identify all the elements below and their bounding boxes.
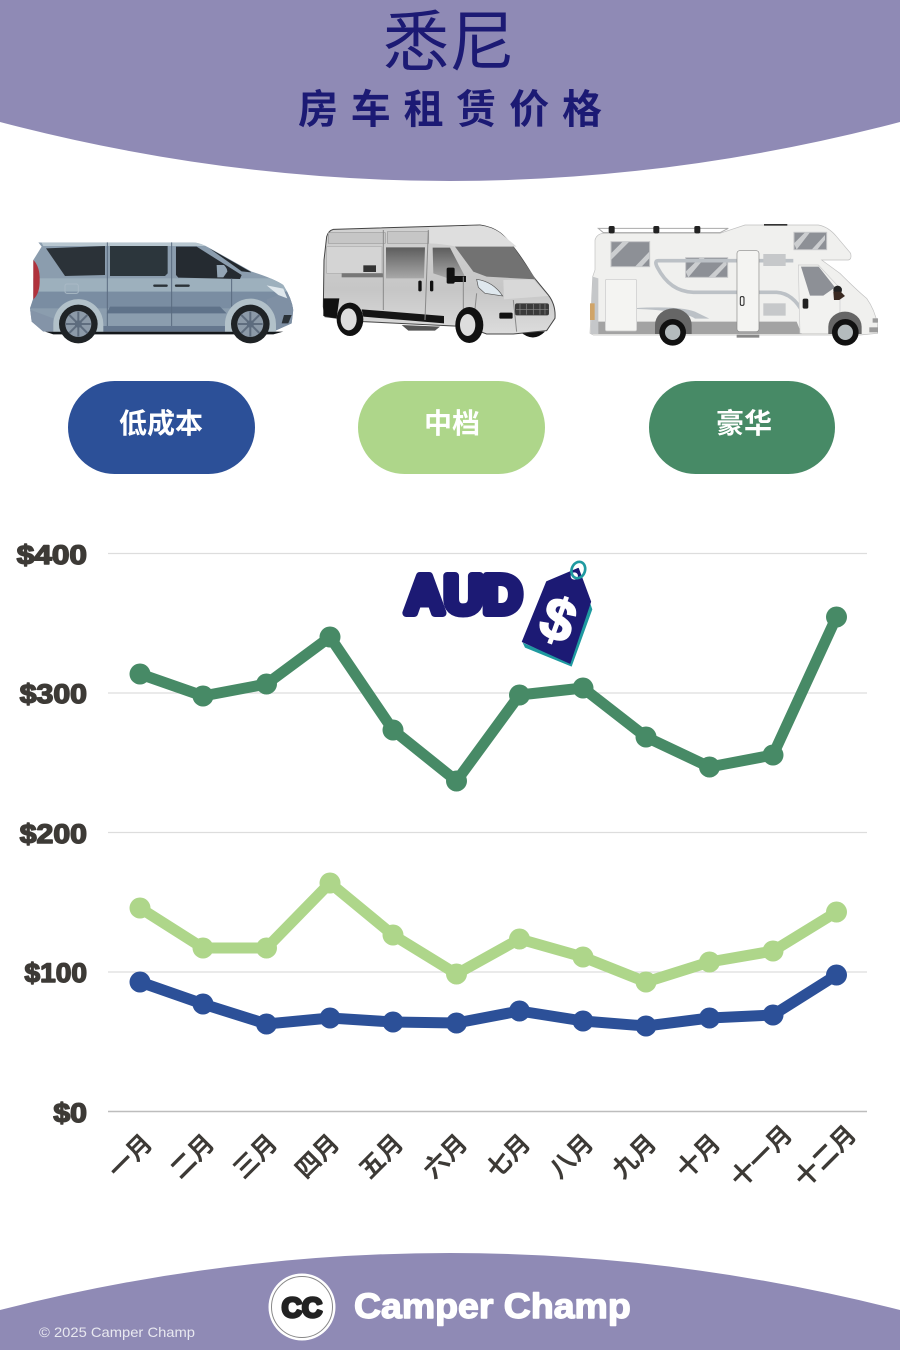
- legend pill: luxury: 豪华: [716, 402, 772, 442]
- currency badge: AUD price tag: [405, 560, 592, 667]
- series: low cost: [130, 964, 847, 1036]
- header panel: [0, 0, 900, 181]
- x axis month labels: 五月: [350, 1125, 411, 1186]
- currency badge: AUD price tag: AUD: [405, 565, 522, 625]
- x axis month labels: 十一月: [721, 1116, 800, 1195]
- brand name: Camper Champ: [354, 1286, 631, 1326]
- x axis month labels: 二月: [161, 1125, 222, 1186]
- line chart: [17, 540, 867, 1195]
- copyright: © 2025 Camper Champ: [39, 1324, 195, 1340]
- legend pill: mid-range: [358, 381, 545, 474]
- icon: luxury motorhome: [590, 224, 878, 346]
- y axis labels: [17, 540, 87, 1129]
- y axis labels: $0: [53, 1098, 87, 1129]
- logo: Camper Champ badge: [268, 1274, 336, 1340]
- y axis labels: $200: [20, 819, 87, 850]
- icon: mid-range van: [323, 225, 555, 343]
- series: mid-range: [130, 872, 847, 992]
- footer panel: [0, 1253, 900, 1350]
- x axis month labels: 八月: [540, 1125, 601, 1186]
- y axis labels: $100: [25, 957, 87, 988]
- x axis month labels: 一月: [99, 1125, 160, 1186]
- legend pill: luxury: [649, 381, 835, 474]
- x axis month labels: 十二月: [785, 1116, 864, 1195]
- x axis month labels: [99, 1116, 864, 1195]
- x axis month labels: 四月: [286, 1125, 347, 1186]
- icon: low cost minivan: [27, 240, 297, 343]
- y axis labels: $400: [17, 540, 87, 570]
- series: luxury: [130, 606, 847, 792]
- logo: Camper Champ badge: CC: [282, 1292, 322, 1323]
- icon: price tag: [522, 560, 592, 667]
- y axis labels: $300: [20, 679, 87, 710]
- legend pill: low cost: [68, 381, 255, 474]
- x axis month labels: 十月: [667, 1125, 728, 1186]
- x axis month labels: 七月: [477, 1125, 538, 1186]
- legend pill: low cost: 低成本: [119, 402, 203, 442]
- subtitle: 房车租赁价格: [298, 77, 615, 135]
- x axis month labels: 九月: [603, 1125, 664, 1186]
- x axis month labels: 三月: [224, 1125, 285, 1186]
- x axis month labels: 六月: [414, 1125, 475, 1186]
- legend pill: mid-range: 中档: [424, 402, 480, 442]
- icon: price tag: $: [531, 582, 585, 657]
